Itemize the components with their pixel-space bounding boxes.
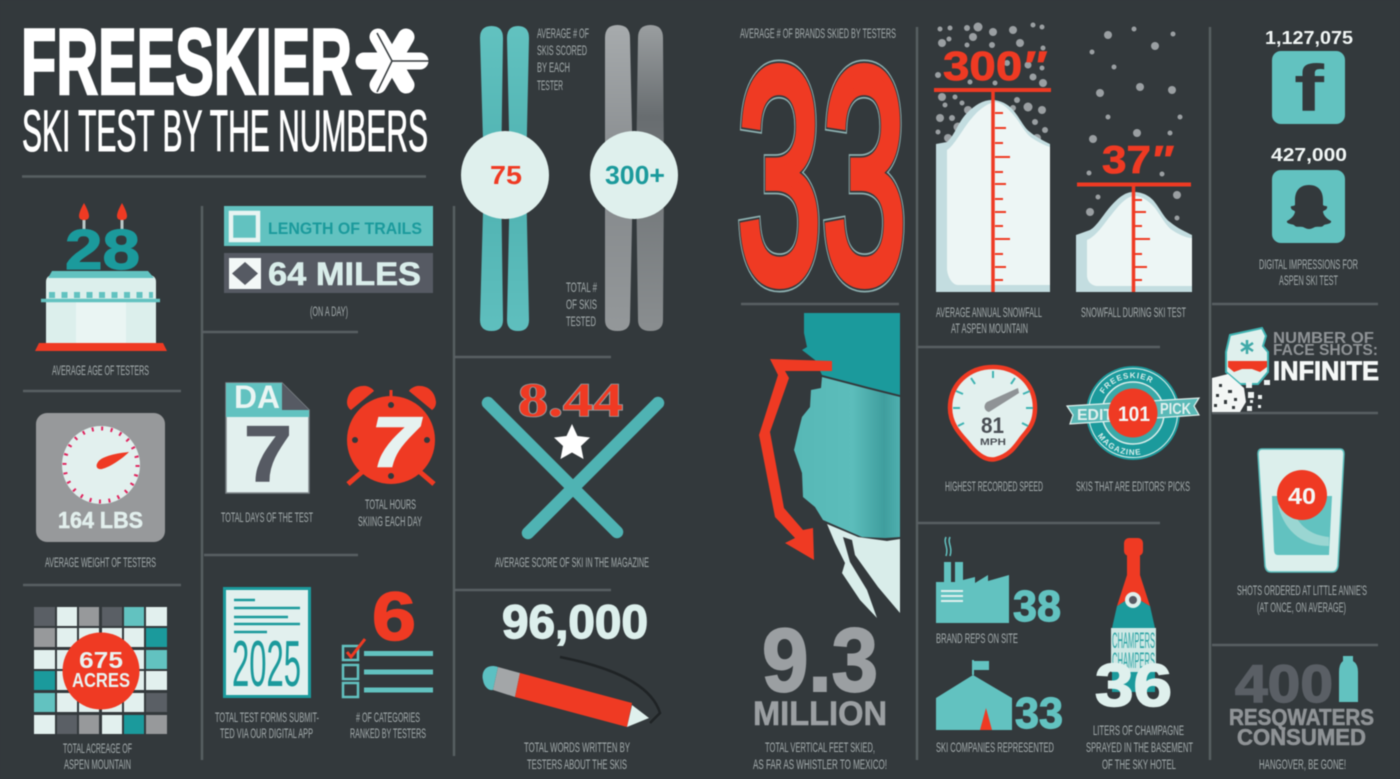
label: 64 miles bbox=[224, 253, 433, 293]
number: 9.3 million: MILLION bbox=[753, 695, 887, 733]
panel: skis scored bbox=[461, 25, 589, 331]
label: length of trails bbox=[224, 206, 433, 246]
panel: highest speed bbox=[945, 367, 1043, 494]
icon: birthday cake: 28 bbox=[65, 218, 140, 282]
icon: calendar: 7 bbox=[244, 409, 292, 498]
icon: facebook bbox=[1272, 51, 1345, 125]
caption: SKIS THAT ARE EDITORS' PICKS bbox=[1076, 478, 1190, 494]
label: length of trails: LENGTH OF TRAILS bbox=[268, 219, 422, 238]
caption: TOTAL WORDS WRITTEN BY bbox=[524, 739, 630, 755]
number: 96,000: 96,000 bbox=[502, 595, 648, 648]
number: 8.44: 8.44 bbox=[518, 374, 623, 427]
caption: TESTED bbox=[566, 313, 596, 329]
caption bbox=[215, 709, 319, 741]
panel: categories bbox=[343, 578, 433, 741]
caption bbox=[753, 739, 887, 772]
caption: TOTAL DAYS OF THE TEST bbox=[221, 509, 313, 525]
caption: AS FAR AS WHISTLER TO MEXICO! bbox=[753, 756, 887, 772]
caption: ASPEN MOUNTAIN bbox=[64, 756, 131, 772]
icon: skier face in snow bbox=[1212, 328, 1270, 412]
icon: water bottle bbox=[1339, 656, 1358, 702]
icon: checklist bbox=[343, 639, 433, 697]
icon: editors pick badge: PICK bbox=[1160, 401, 1191, 418]
icon: snow pile with ruler bbox=[1076, 184, 1192, 292]
caption bbox=[358, 496, 422, 529]
chart: map of western North America bbox=[794, 313, 900, 618]
caption: RANKED BY TESTERS bbox=[350, 725, 426, 741]
panel: champagne bbox=[1086, 538, 1193, 772]
caption: SKI COMPANIES REPRESENTED bbox=[936, 739, 1054, 755]
panel: total acreage: TOTAL ACREAGE OF bbox=[63, 740, 132, 756]
panel: length of trails bbox=[224, 206, 433, 319]
icon: calendar: DA bbox=[234, 379, 280, 415]
icon: star bbox=[554, 424, 590, 459]
label: 64 miles: 64 MILES bbox=[268, 256, 421, 292]
panel: total hours bbox=[347, 386, 436, 529]
panel: brand reps bbox=[936, 537, 1061, 646]
panel: annual snowfall bbox=[934, 22, 1051, 336]
caption: OF SKIS bbox=[566, 296, 597, 312]
icon: calendar bbox=[226, 379, 309, 498]
heading: FREESKIER: FREESKIER bbox=[21, 9, 352, 114]
icon: editors pick badge: 101 bbox=[1118, 403, 1150, 426]
caption: # OF CATEGORIES bbox=[356, 709, 420, 725]
icon: shot glass bbox=[1258, 449, 1344, 572]
icon: shot glass: 40 bbox=[1288, 483, 1316, 509]
icon: champagne bottle bbox=[1111, 538, 1156, 692]
heading: resqwaters consumed: CONSUMED bbox=[1237, 724, 1366, 750]
caption: ASPEN SKI TEST bbox=[1279, 272, 1338, 288]
icon: form document bbox=[224, 588, 310, 700]
number: 36: 36 bbox=[1095, 652, 1172, 719]
heading: number of face shots infinite: INFINITE bbox=[1273, 356, 1379, 386]
number: 37 inches: 37″ bbox=[1102, 139, 1175, 182]
number: facebook impressions: 1,127,075 bbox=[1265, 28, 1353, 48]
caption: TOTAL TEST FORMS SUBMIT- bbox=[215, 709, 319, 725]
panel: vertical feet bbox=[753, 313, 900, 772]
heading: resqwaters consumed: RESQWATERS bbox=[1229, 704, 1374, 730]
caption: (ON A DAY) bbox=[310, 303, 348, 319]
icon: speedometer bbox=[950, 367, 1035, 460]
caption bbox=[1086, 722, 1193, 772]
heading: number of face shots infinite: NUMBER OF bbox=[1273, 330, 1374, 347]
number: 300 inches: 300 ″ bbox=[943, 43, 1048, 89]
number: 9.3 million: 9.3 bbox=[762, 611, 878, 711]
caption: AT ASPEN MOUNTAIN bbox=[951, 320, 1028, 336]
caption: AVERAGE AGE OF TESTERS bbox=[52, 362, 149, 378]
arrow: route to Mexico bbox=[759, 359, 832, 560]
caption: BRAND REPS ON SITE bbox=[936, 630, 1018, 646]
panel: ski companies bbox=[936, 660, 1063, 755]
caption bbox=[936, 304, 1042, 336]
icon: editors pick badge: EDIT bbox=[1077, 407, 1113, 424]
panel: average age bbox=[35, 203, 167, 378]
icon: snow pile with ruler bbox=[934, 90, 1051, 292]
caption: TOTAL # bbox=[566, 279, 597, 295]
caption: TOTAL VERTICAL FEET SKIED, bbox=[765, 739, 875, 755]
caption: SKIS SCORED bbox=[537, 42, 587, 58]
icon: crossed skis bbox=[488, 403, 658, 533]
panel: test forms bbox=[215, 588, 319, 741]
icon: speedometer: 81 bbox=[981, 413, 1004, 438]
caption: AVERAGE SCORE OF SKI IN THE MAGAZINE bbox=[495, 554, 649, 570]
caption: BY EACH bbox=[537, 59, 570, 75]
number: 33: 33 bbox=[737, 5, 907, 346]
icon: tent bbox=[936, 660, 1012, 730]
chart: acreage grid: ACRES bbox=[72, 670, 130, 692]
caption bbox=[63, 740, 132, 772]
icon: snapchat bbox=[1272, 170, 1345, 243]
icon: snowflake logo bbox=[364, 33, 431, 92]
panel: average brands bbox=[737, 5, 907, 346]
panel: average weight bbox=[36, 413, 165, 570]
icon: grey skis bbox=[605, 25, 664, 331]
number: 38: 38 bbox=[1013, 582, 1061, 631]
panel: average score bbox=[488, 374, 658, 570]
decoration: falling snow bbox=[1086, 26, 1182, 220]
panel: skis tested bbox=[566, 25, 678, 331]
icon: scale: 164 LBS bbox=[58, 507, 143, 533]
caption: SNOWFALL DURING SKI TEST bbox=[1081, 304, 1186, 320]
caption: SKIING EACH DAY bbox=[358, 513, 422, 529]
panel: social impressions bbox=[1259, 28, 1358, 288]
icon: speedometer: MPH bbox=[980, 437, 1006, 447]
decoration: falling snow bbox=[935, 22, 1048, 142]
number: 6: 6 bbox=[372, 578, 416, 655]
panel: champagne: CHAMPERS bbox=[1112, 648, 1155, 673]
caption bbox=[350, 709, 426, 741]
chart: acreage grid: 675 bbox=[79, 647, 123, 673]
panel: champagne: CHAMPERS bbox=[1112, 628, 1155, 653]
heading: number of face shots infinite bbox=[1273, 330, 1379, 386]
panel: resqwaters bbox=[1229, 655, 1374, 772]
badge: 75 bbox=[461, 131, 549, 219]
number: 33: 33 bbox=[737, 5, 907, 346]
badge: 300+ bbox=[590, 131, 678, 219]
caption: SPRAYED IN THE BASEMENT bbox=[1086, 739, 1193, 755]
number: 400: 400 bbox=[1235, 655, 1333, 714]
icon: alarm clock bbox=[347, 386, 436, 484]
icon: factory bbox=[936, 537, 1009, 623]
icon: form document: 2025 bbox=[232, 627, 301, 700]
caption: LITERS OF CHAMPAGNE bbox=[1093, 722, 1184, 738]
title: Freeskier masthead bbox=[21, 9, 431, 164]
caption: AVERAGE # OF BRANDS SKIED BY TESTERS bbox=[740, 25, 896, 41]
badge: 300+: 300+ bbox=[605, 160, 665, 190]
icon: editors pick badge: FREESKIER bbox=[1099, 372, 1154, 394]
icon: scale bbox=[36, 413, 165, 542]
caption bbox=[1259, 256, 1358, 288]
heading: resqwaters consumed bbox=[1229, 704, 1374, 750]
text: HIGHEST RECORDED SPEED bbox=[945, 478, 1043, 494]
caption: AVERAGE WEIGHT OF TESTERS bbox=[45, 554, 156, 570]
panel: total days bbox=[221, 379, 313, 525]
caption: OF THE SKY HOTEL bbox=[1102, 756, 1176, 772]
badge: 75: 75 bbox=[490, 160, 522, 190]
panel: face shots bbox=[1212, 328, 1379, 412]
caption: AVERAGE ANNUAL SNOWFALL bbox=[936, 304, 1042, 320]
chart: acreage grid bbox=[34, 607, 167, 734]
caption: TESTERS ABOUT THE SKIS bbox=[527, 756, 627, 772]
panel: shots ordered bbox=[1237, 449, 1367, 615]
number: snapchat impressions: 427,000 bbox=[1271, 145, 1347, 165]
panel: total acreage bbox=[34, 607, 167, 772]
caption bbox=[524, 739, 630, 772]
icon: facebook: f bbox=[1294, 51, 1325, 125]
caption: TESTER bbox=[537, 77, 563, 93]
icon: editors pick badge bbox=[1066, 366, 1200, 460]
panel: ski test snowfall bbox=[1076, 26, 1192, 320]
panel: words written bbox=[483, 595, 660, 772]
number: 33 bbox=[737, 5, 907, 346]
icon: pencil bbox=[483, 657, 660, 727]
caption bbox=[537, 25, 589, 93]
heading: number of face shots infinite: FACE SHOTS: bbox=[1273, 342, 1378, 359]
caption bbox=[566, 279, 597, 329]
number: 33: 33 bbox=[1015, 689, 1063, 738]
caption: AVERAGE # OF bbox=[537, 25, 589, 41]
icon: birthday cake bbox=[35, 203, 167, 351]
icon: editors pick badge: MAGAZINE bbox=[1097, 432, 1141, 456]
number: 33: 33 bbox=[737, 5, 907, 346]
panel: editors picks bbox=[1066, 366, 1200, 494]
icon: teal skis bbox=[480, 26, 529, 331]
caption: TED VIA OUR DIGITAL APP bbox=[220, 725, 313, 741]
icon: alarm clock: 7 bbox=[372, 403, 422, 481]
caption: TOTAL HOURS bbox=[365, 496, 416, 512]
caption bbox=[1237, 582, 1367, 615]
subtitle: SKI TEST BY THE NUMBERS bbox=[22, 99, 428, 164]
